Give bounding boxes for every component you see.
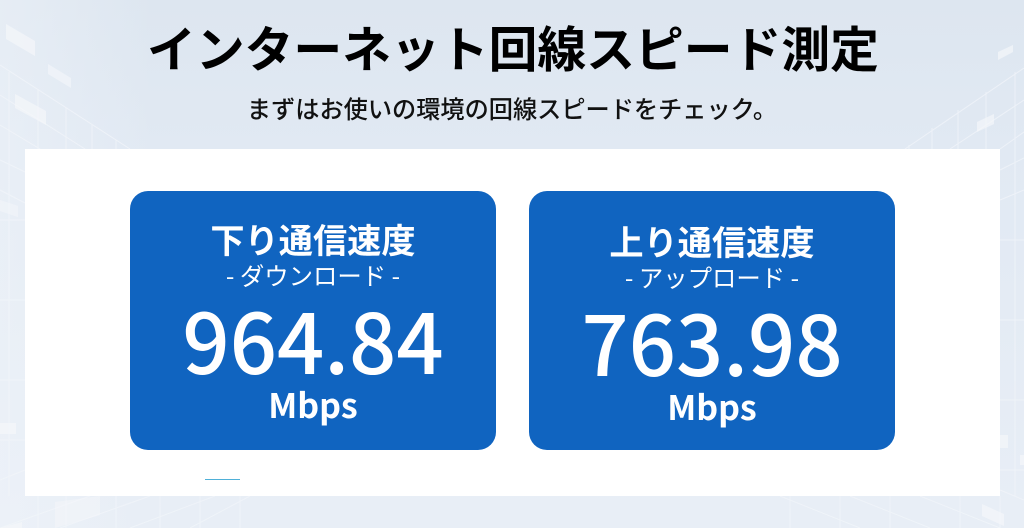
card: download speed [130, 191, 496, 450]
heading: upload: 上り通信速度 [609, 215, 815, 265]
card: upload speed [529, 191, 895, 450]
unit: download: Mbps [268, 379, 358, 428]
label: download katakana: - ダウンロード - [226, 258, 400, 293]
value: download speed: 964.84 [182, 278, 444, 398]
small accent line [205, 479, 240, 480]
title: インターネット回線スピード測定 [147, 11, 879, 82]
unit: upload: Mbps [667, 381, 757, 430]
value: upload speed: 763.98 [581, 280, 843, 400]
panel: white results area [25, 149, 1000, 496]
subtitle: まずはお使いの環境の回線スピードをチェック。 [247, 90, 777, 125]
heading: download: 下り通信速度 [210, 213, 416, 263]
label: upload katakana: - アップロード - [625, 260, 799, 295]
